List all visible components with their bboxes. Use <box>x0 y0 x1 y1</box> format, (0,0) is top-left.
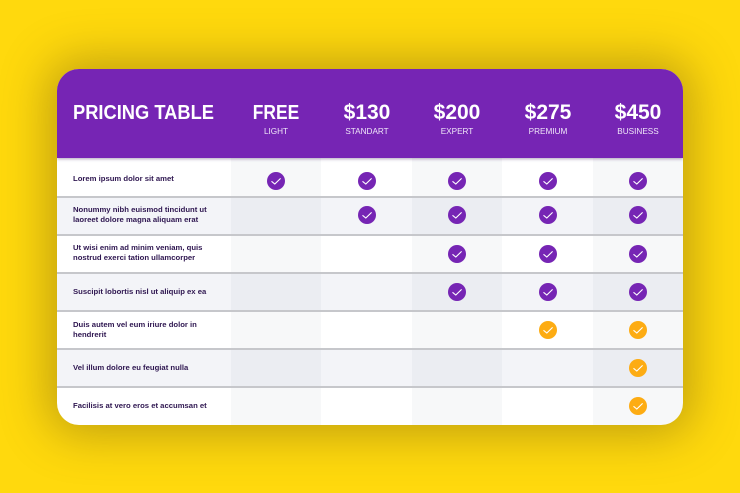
check row 3 business <box>629 245 647 263</box>
row background 3 <box>57 235 683 273</box>
check row 4 business <box>629 283 647 301</box>
row background 7 <box>57 387 683 425</box>
feature text 2: laoreet dolore magna aliquam erat <box>73 215 198 224</box>
plan: $130: $130 <box>344 100 390 124</box>
check row 1 expert <box>448 172 466 190</box>
feature text 2 <box>73 205 207 224</box>
check row 4 premium <box>539 283 557 301</box>
plan: $275: PREMIUM <box>529 126 567 136</box>
plan: free: FREE <box>253 102 299 124</box>
plan: $130 <box>344 100 390 136</box>
plan: $450: $450 <box>615 100 661 124</box>
feature text 7: Facilisis at vero eros et accumsan et <box>73 400 207 410</box>
feature text 1: Lorem ipsum dolor sit amet <box>73 174 174 183</box>
check row 1 free <box>267 172 285 190</box>
plan: $200 <box>434 100 480 136</box>
feature text 3: nostrud exerci tation ullamcorper <box>73 253 195 262</box>
feature text 6: Vel illum dolore eu feugiat nulla <box>73 362 188 372</box>
plan: free <box>253 102 299 136</box>
row background 1 <box>57 158 683 197</box>
feature text 3: Ut wisi enim ad minim veniam, quis <box>73 243 202 252</box>
check row 3 expert <box>448 245 466 263</box>
check row 1 premium <box>539 172 557 190</box>
plan: free: LIGHT <box>264 126 288 136</box>
check row 4 expert <box>448 283 466 301</box>
feature text 4: Suscipit lobortis nisl ut aliquip ex ea <box>73 286 206 296</box>
plan: $200: $200 <box>434 100 480 124</box>
check row 1 standart <box>358 172 376 190</box>
plan: $275 <box>524 100 571 136</box>
check row 7 business <box>629 397 647 415</box>
check row 2 standart <box>358 206 376 224</box>
plan: $200: EXPERT <box>441 126 473 136</box>
check row 2 expert <box>448 206 466 224</box>
panel: pricing table card <box>57 69 683 424</box>
row background 4 <box>57 273 683 311</box>
plan: $275: $275 <box>525 100 571 124</box>
title: PRICING TABLE <box>73 102 214 124</box>
row background 2 <box>57 197 683 235</box>
row background 6 <box>57 349 683 387</box>
feature text 5 <box>73 320 197 339</box>
check row 1 business <box>629 172 647 190</box>
feature text 3 <box>73 243 202 262</box>
feature text 5: hendrerit <box>73 330 106 339</box>
check row 3 premium <box>539 245 557 263</box>
feature text 5: Duis autem vel eum iriure dolor in <box>73 320 197 329</box>
header band <box>57 69 683 158</box>
plan: $450 <box>614 100 661 136</box>
plan: $130: STANDART <box>345 126 389 136</box>
feature text 2: Nonummy nibh euismod tincidunt ut <box>73 205 207 214</box>
check row 5 premium <box>539 321 557 339</box>
check row 5 business <box>629 321 647 339</box>
plan: $450: BUSINESS <box>617 126 659 136</box>
check row 2 premium <box>539 206 557 224</box>
check row 6 business <box>629 359 647 377</box>
row background 5 <box>57 311 683 349</box>
check row 2 business <box>629 206 647 224</box>
